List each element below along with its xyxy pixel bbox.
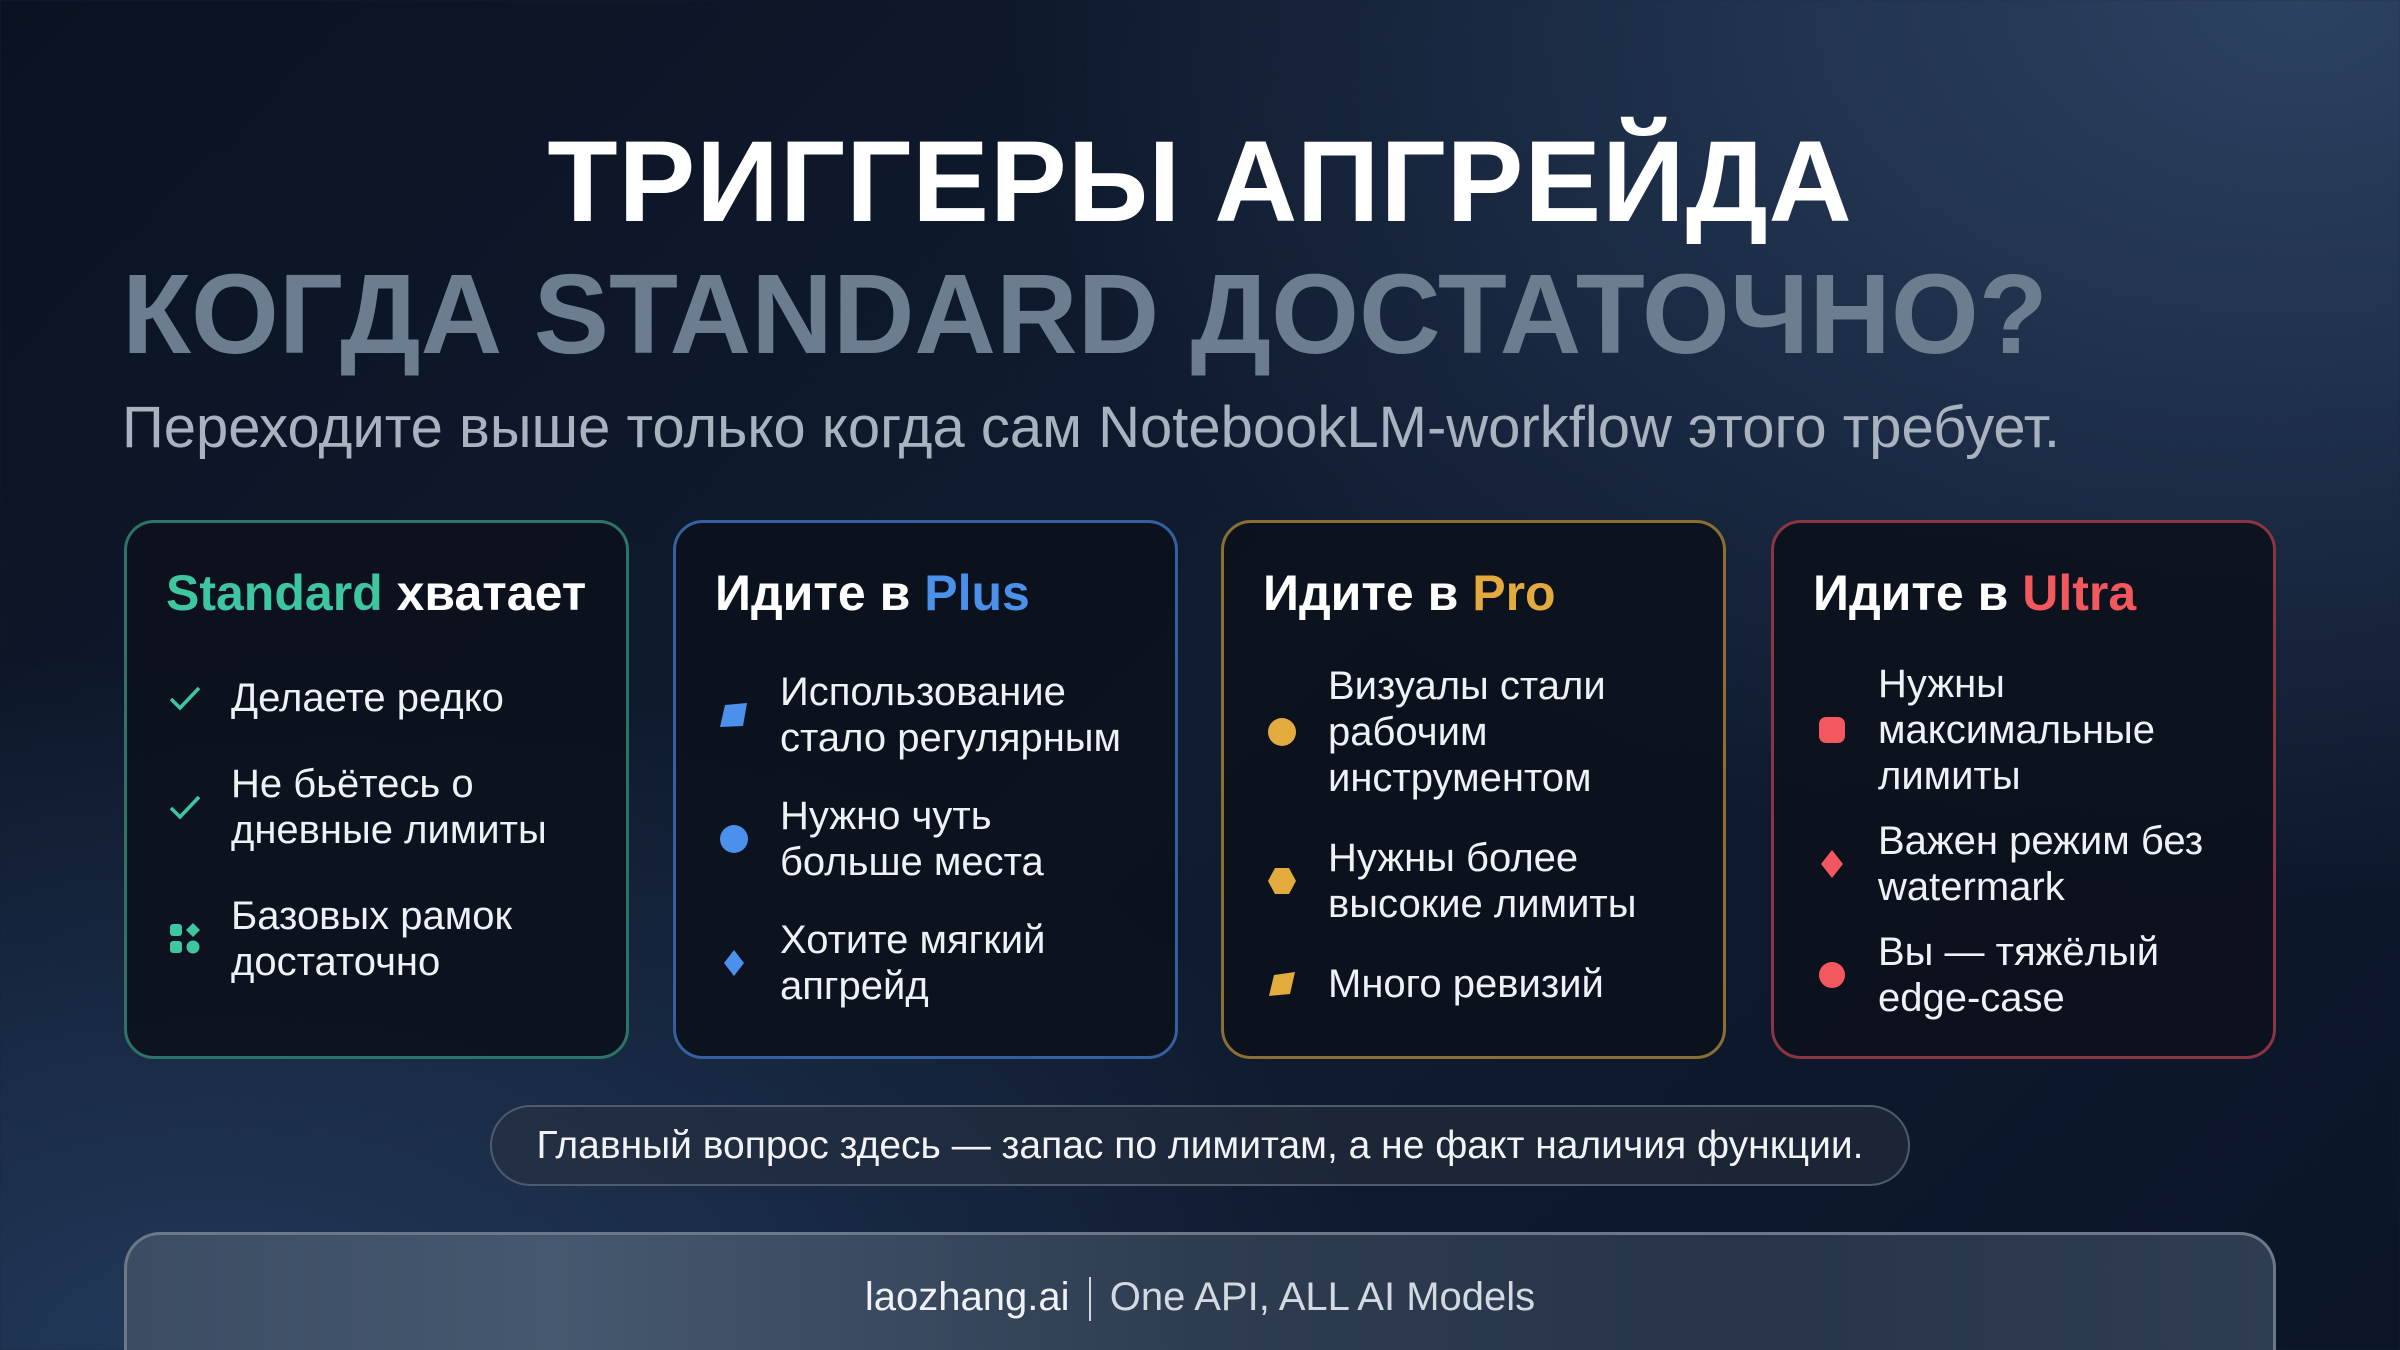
intro text: Переходите выше только когда сам NotebookLM-workflow этого требует. (122, 395, 2060, 460)
item: more space (720, 794, 1044, 884)
callout pill (490, 1105, 1910, 1186)
callout pill: Главный вопрос здесь — запас по лимитам, а не факт наличия функции. (536, 1124, 1864, 1167)
item: basic: достаточно (231, 940, 440, 984)
heading: plus: Идите в Plus (715, 565, 1030, 621)
item: soft upgrade: Хотите мягкий (780, 918, 1045, 962)
panel: plus (673, 520, 1178, 1059)
item: visuals: рабочим (1328, 710, 1487, 754)
item: limits (170, 762, 547, 852)
item: visuals: Визуалы стали (1328, 664, 1606, 708)
heading: pro: Идите в Pro (1263, 565, 1556, 621)
list: plus (720, 670, 1121, 1008)
item: limits: дневные лимиты (231, 808, 547, 852)
item: basic (170, 894, 512, 984)
footer banner (124, 1232, 2276, 1350)
item: soft upgrade (724, 918, 1045, 1008)
item: revisions: Много ревизий (1328, 962, 1604, 1006)
item: watermark (1821, 819, 2203, 909)
title: ТРИГГЕРЫ АПГРЕЙДА (547, 118, 1853, 246)
list: ultra (1819, 662, 2203, 1020)
item: max limits: лимиты (1878, 754, 2021, 798)
subtitle heading: КОГДА STANDARD ДОСТАТОЧНО? (122, 251, 2048, 377)
item: max limits: Нужны (1878, 662, 2005, 706)
panel: pro (1221, 520, 1726, 1059)
item: more space: Нужно чуть (780, 794, 992, 838)
item: rarely: Делаете редко (231, 676, 504, 720)
item: limits: Не бьётесь о (231, 762, 474, 806)
footer banner: laozhang.ai One API, ALL AI Models (865, 1275, 1535, 1319)
item: regular (720, 670, 1121, 760)
item: edge-case: Вы — тяжёлый (1878, 930, 2159, 974)
item: visuals (1268, 664, 1606, 800)
list: pro (1268, 664, 1636, 1006)
item: edge-case: edge-case (1878, 976, 2065, 1020)
item: more space: больше места (780, 840, 1044, 884)
item: regular: стало регулярным (780, 716, 1121, 760)
item: watermark: Важен режим без (1878, 819, 2203, 863)
item: soft upgrade: апгрейд (780, 964, 929, 1008)
item: max limits (1819, 662, 2155, 798)
item: edge-case (1819, 930, 2159, 1020)
item: basic: Базовых рамок (231, 894, 512, 938)
item: higher limits: высокие лимиты (1328, 882, 1636, 926)
heading: ultra: Идите в Ultra (1813, 565, 2136, 621)
panel: standard (124, 520, 629, 1059)
item: higher limits (1268, 836, 1636, 926)
item: watermark: watermark (1878, 865, 2065, 909)
item: regular: Использование (780, 670, 1066, 714)
item: max limits: максимальные (1878, 708, 2155, 752)
item: visuals: инструментом (1328, 756, 1592, 800)
panel: ultra (1771, 520, 2276, 1059)
heading: standard: Standard хватает (166, 565, 586, 621)
item: higher limits: Нужны более (1328, 836, 1578, 880)
list: standard (170, 676, 547, 984)
